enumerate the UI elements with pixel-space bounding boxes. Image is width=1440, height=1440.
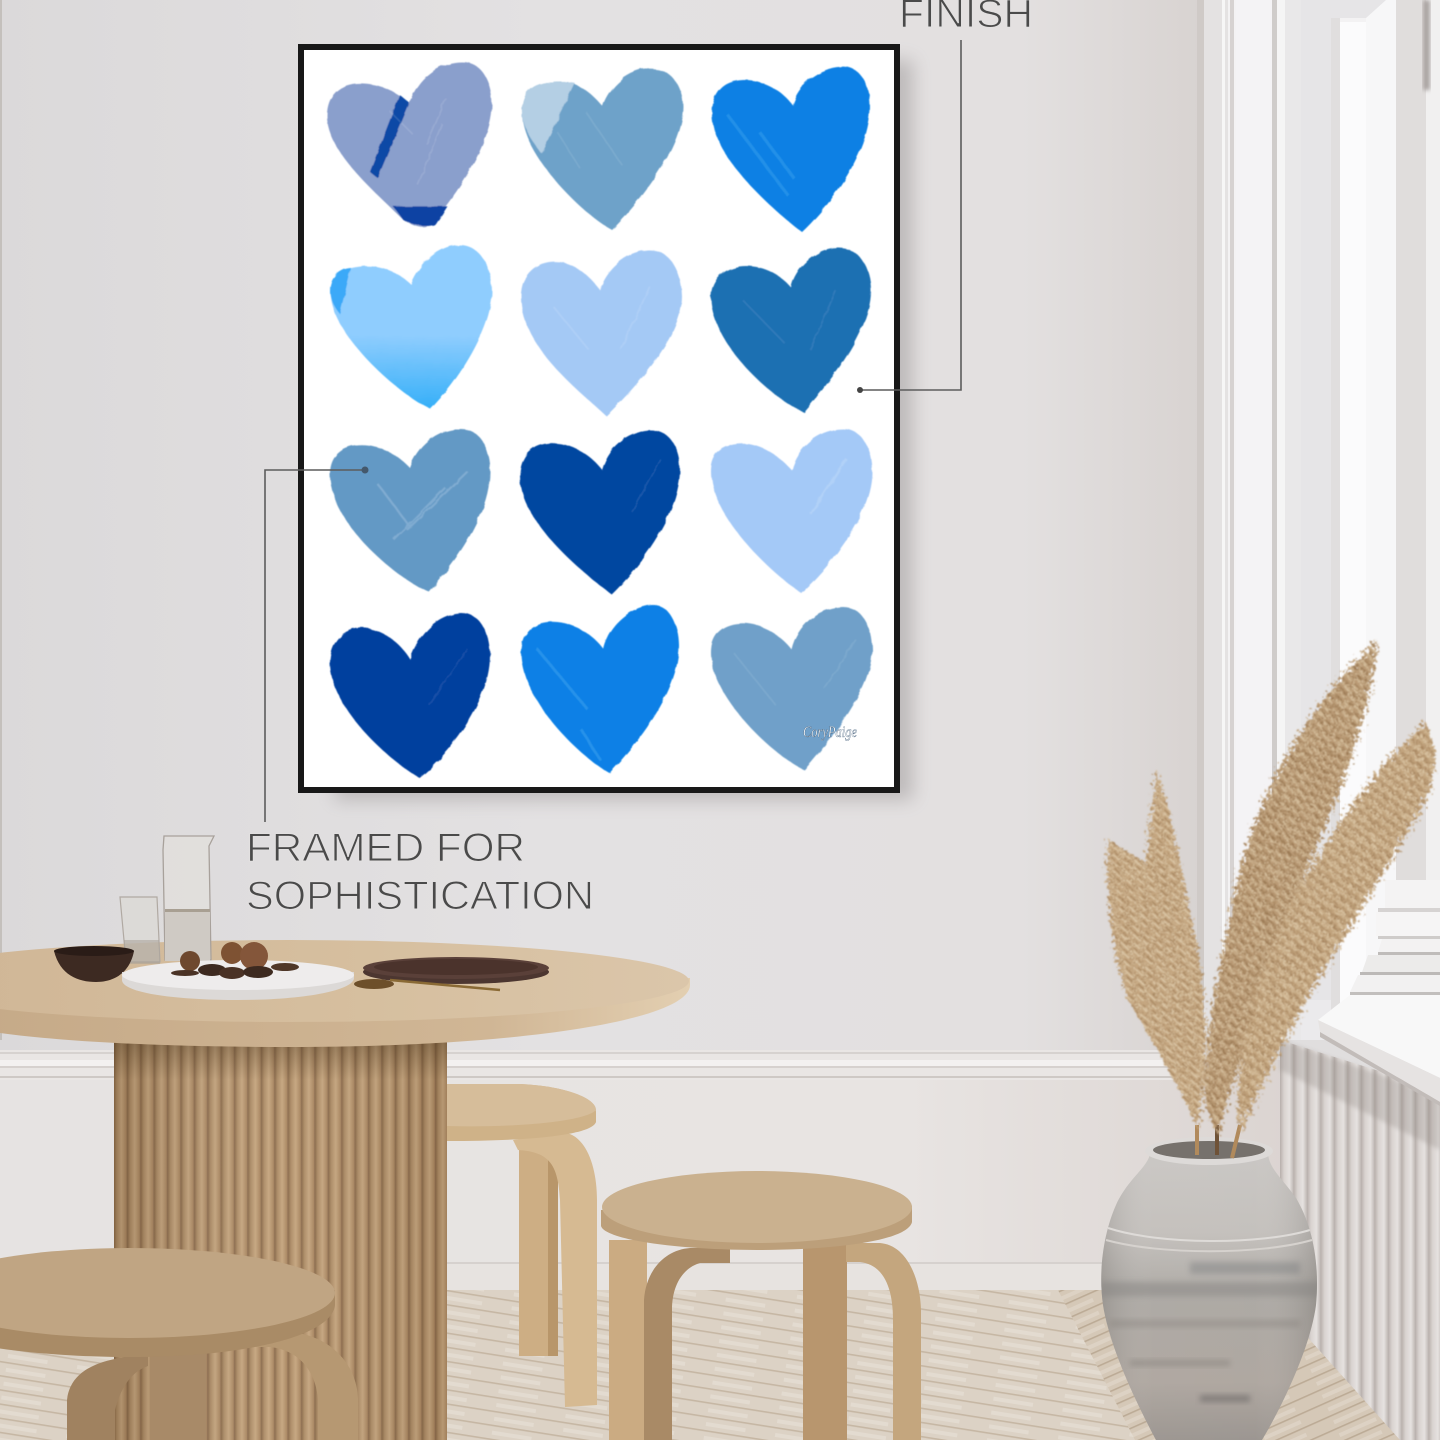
round table top bbox=[0, 940, 690, 1047]
callout: framed for sophistication label: SOPHISTICATION bbox=[246, 874, 594, 918]
heart 7 steel blue bbox=[330, 429, 490, 592]
herringbone floor bbox=[0, 1290, 1420, 1440]
pampas grass plumes bbox=[1107, 640, 1435, 1135]
heart 8 navy blue bbox=[520, 430, 680, 594]
plume: center bbox=[1204, 640, 1378, 1135]
dried nuts bbox=[171, 942, 299, 979]
callout: framed leader line bbox=[265, 466, 368, 822]
front left stool bbox=[0, 1248, 358, 1440]
dark wood bowl bbox=[54, 946, 134, 982]
window sill bbox=[1318, 995, 1440, 1106]
front right stool bbox=[601, 1171, 921, 1440]
vase rim bbox=[1145, 1137, 1273, 1165]
heart 6 denim blue bbox=[711, 248, 871, 412]
glass tumbler bbox=[120, 897, 160, 964]
callout: finish leader line bbox=[857, 40, 961, 393]
heart 4 sky blue bbox=[330, 245, 492, 409]
plume: left bbox=[1107, 770, 1205, 1130]
frame shadow bbox=[335, 60, 913, 800]
heart 9 pale blue bbox=[711, 429, 872, 593]
lower wall panel bbox=[0, 1060, 1290, 1300]
heart 12 slate blue bbox=[711, 607, 872, 770]
back stool bbox=[447, 1084, 597, 1407]
black frame bbox=[298, 44, 900, 793]
glass carafe bbox=[163, 836, 214, 961]
window frame bbox=[1197, 0, 1440, 1040]
grid of twelve hearts bbox=[327, 62, 872, 778]
wall bbox=[0, 0, 1200, 1060]
callout: framed for sophistication label: FRAMED FOR bbox=[246, 826, 525, 870]
artist signature: CoryPaige bbox=[803, 724, 857, 741]
vase weathering bbox=[1101, 1199, 1317, 1404]
radiator bbox=[1280, 1040, 1440, 1440]
marble serving board bbox=[122, 960, 354, 1000]
left edge shadow bbox=[0, 0, 2, 1040]
baseboard bbox=[0, 1262, 1110, 1290]
ceramic vase bbox=[1095, 1137, 1325, 1440]
dark wood plate bbox=[363, 957, 549, 984]
framed print bbox=[298, 44, 913, 800]
pampas stems bbox=[1197, 1125, 1240, 1158]
heart 10 navy blue bbox=[330, 613, 490, 778]
heart 2 slate blue bbox=[522, 69, 683, 230]
heart 11 vivid blue bbox=[521, 605, 679, 773]
fluted table pedestal bbox=[114, 1030, 447, 1440]
chair rail bbox=[0, 1050, 1185, 1080]
brass spoons bbox=[354, 979, 500, 990]
heart 1 periwinkle bbox=[327, 62, 492, 227]
heart 3 vivid blue bbox=[712, 67, 870, 232]
window ledge with books bbox=[1350, 880, 1440, 996]
callout: framed for sophistication label bbox=[246, 826, 594, 918]
plume: right bbox=[1238, 722, 1435, 1132]
heart 5 pale blue bbox=[521, 250, 682, 416]
white paper bbox=[304, 50, 894, 787]
